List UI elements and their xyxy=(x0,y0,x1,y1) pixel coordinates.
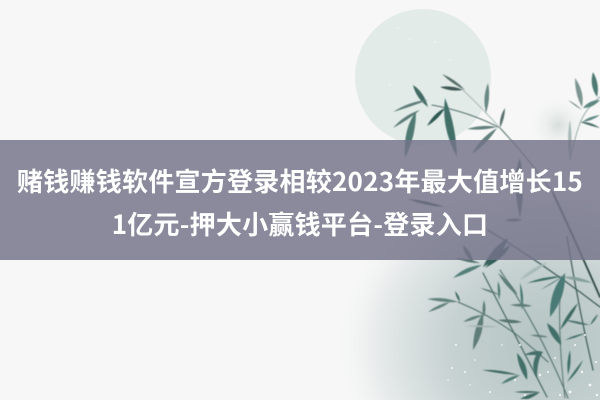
moon xyxy=(355,9,491,145)
bamboo: leaves xyxy=(393,72,600,399)
mist xyxy=(300,200,600,400)
title band xyxy=(0,140,600,260)
title text: 1亿元-押大小赢钱平台-登录入口 xyxy=(112,205,488,242)
title text xyxy=(17,162,583,242)
bamboo: stems xyxy=(432,90,600,398)
small mist behind upper right leaves xyxy=(528,95,588,155)
white speckles xyxy=(389,27,598,396)
title text: 赌钱赚钱软件宣方登录相较2023年最大值增长15 xyxy=(17,162,583,199)
